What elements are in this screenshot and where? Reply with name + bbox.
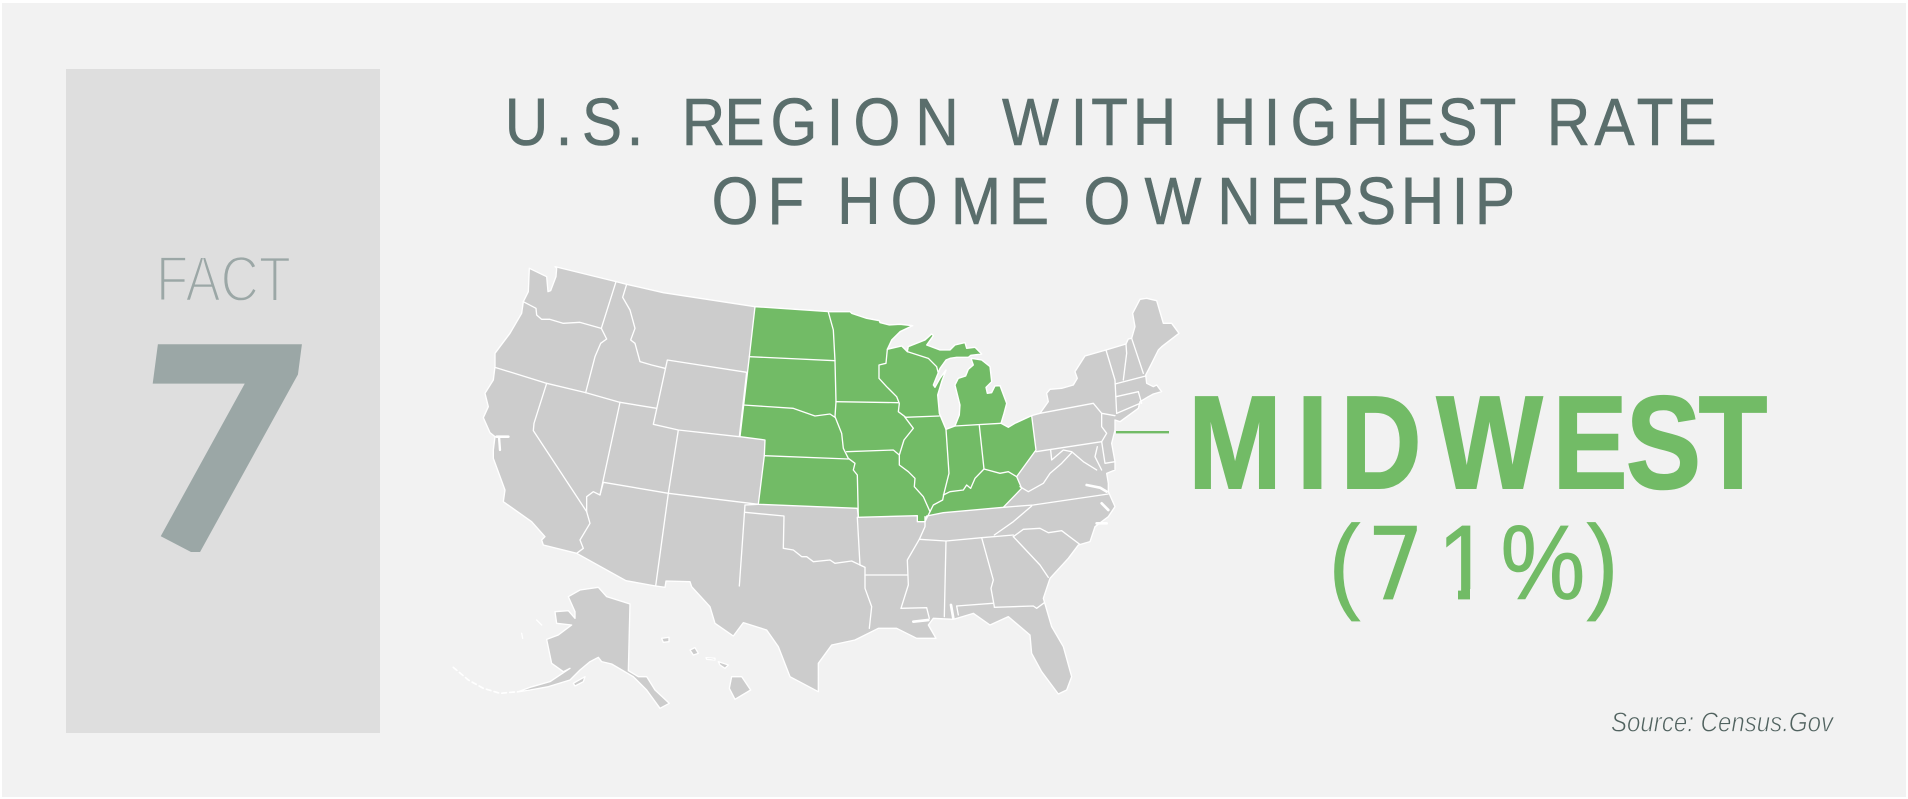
- title: [505, 84, 1717, 239]
- map: Midwest states highlighted: [740, 307, 1036, 522]
- map: United States: [453, 267, 1179, 708]
- source note: Source: Census.Gov: [1611, 706, 1835, 738]
- callout: MIDWEST: MIDWEST: [1188, 368, 1767, 516]
- title: U.S. REGION WITH HIGHEST RATE: [505, 84, 1717, 160]
- callout connector line: [1116, 431, 1169, 433]
- callout: 71 percent: (71%): [1329, 504, 1618, 623]
- map: contiguous states land: [483, 267, 1179, 694]
- label: FACT: FACT: [156, 243, 291, 315]
- title: OF HOME OWNERSHIP: [712, 163, 1515, 239]
- panel: fact number: [66, 69, 380, 733]
- map: Alaska: [453, 587, 669, 708]
- number: 7: 7: [104, 288, 330, 619]
- map: state borders: [495, 282, 1146, 628]
- decorative mask removing the foot of the numeral 1: [1425, 589, 1458, 601]
- map: Hawaii: [662, 637, 751, 699]
